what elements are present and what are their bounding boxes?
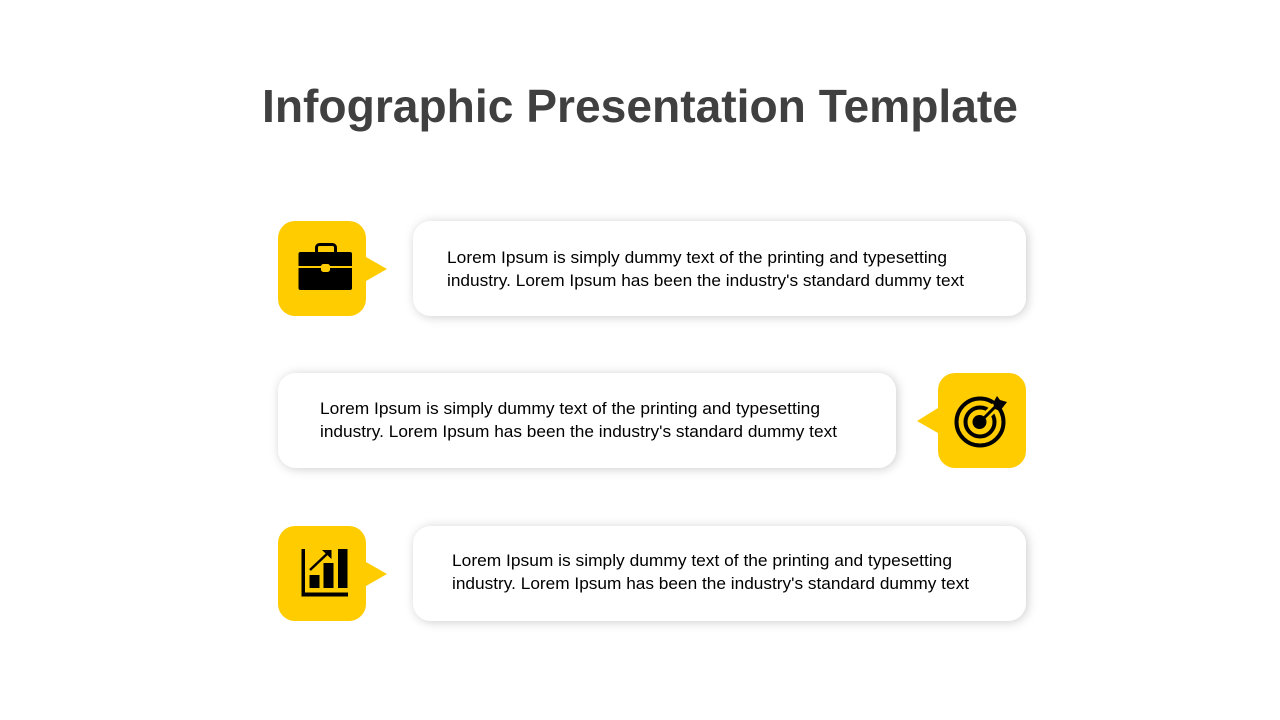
text card 3: Lorem Ipsum is simply dummy text of the printing and typesetting (452, 552, 952, 570)
text card 2: Lorem Ipsum is simply dummy text of the printing and typesetting (320, 400, 820, 418)
icon tile: target (917, 373, 1026, 468)
icon tile: bar chart (278, 526, 387, 621)
text card 2 (278, 373, 896, 468)
text card 2: industry. Lorem Ipsum has been the industry's standard dummy text (320, 423, 837, 441)
text card 1: Lorem Ipsum is simply dummy text of the printing and typesetting (447, 249, 947, 267)
text card 1 (413, 221, 1026, 316)
text card 3 (413, 526, 1026, 621)
panel: row 3 (278, 526, 1026, 621)
text card 3: industry. Lorem Ipsum has been the industry's standard dummy text (452, 575, 969, 593)
icon tile: briefcase (278, 221, 387, 316)
panel: row 1 (278, 221, 1026, 316)
text card 1: industry. Lorem Ipsum has been the industry's standard dummy text (447, 272, 964, 290)
title: Infographic Presentation Template (262, 80, 1018, 132)
panel: row 2 (278, 373, 1026, 468)
